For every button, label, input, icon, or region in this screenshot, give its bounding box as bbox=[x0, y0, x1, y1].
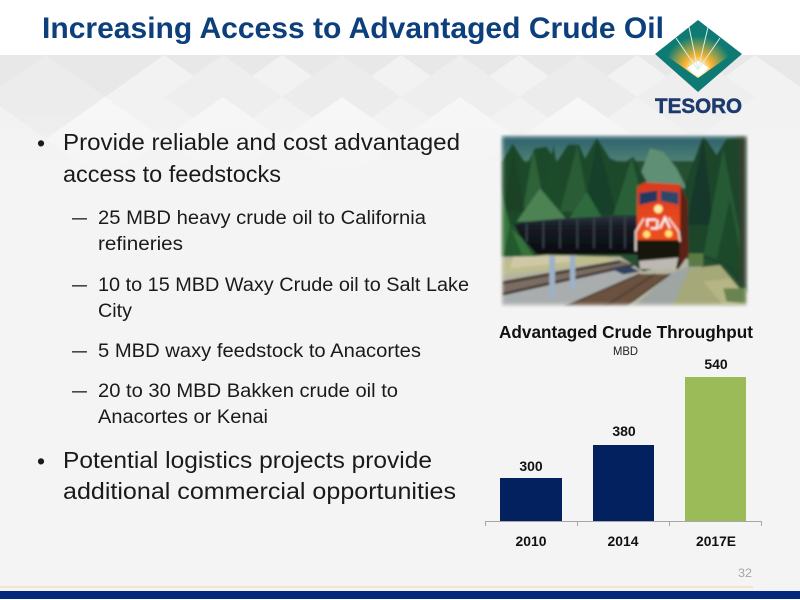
bullet: logistics projects: additional commercial opportunities bbox=[63, 478, 456, 504]
sub-bullet: California: refineries bbox=[98, 234, 183, 255]
sub-bullet: Bakken: 20 to 30 MBD Bakken crude oil to bbox=[98, 381, 398, 402]
sub-bullet: Anacortes: 5 MBD waxy feedstock to Anacortes bbox=[98, 341, 421, 362]
sub-bullet: California: 25 MBD heavy crude oil to California bbox=[98, 208, 426, 229]
sub-bullet: California: – bbox=[72, 208, 88, 229]
page number: 32 bbox=[738, 566, 752, 580]
bar: 2014: 380 bbox=[612, 423, 636, 439]
x axis: 2014 bbox=[608, 533, 639, 549]
bullet: feedstock access: • bbox=[37, 130, 45, 156]
logo wordmark: TESORO bbox=[655, 95, 742, 118]
sub-bullet: Bakken: Anacortes or Kenai bbox=[98, 407, 268, 428]
x axis: 2017E bbox=[696, 533, 736, 549]
bar: 2017E bbox=[685, 356, 746, 521]
sub-bullet: Salt Lake City bbox=[72, 275, 469, 322]
bar: 2014 bbox=[593, 423, 654, 521]
sub-bullet: Salt Lake City: – bbox=[72, 275, 88, 296]
icon: diamond sunburst bbox=[655, 20, 742, 92]
sub-bullet: Salt Lake City: City bbox=[98, 301, 133, 322]
bar chart: advantaged crude throughput bbox=[486, 322, 762, 549]
bullet: logistics projects bbox=[37, 447, 456, 504]
sub-bullet: Bakken: – bbox=[72, 381, 88, 402]
title: Increasing Access to Advantaged Crude Oil bbox=[42, 12, 664, 45]
chart unit: MBD bbox=[613, 344, 638, 358]
sub-bullet: California bbox=[72, 208, 426, 255]
x axis: 2010 bbox=[516, 533, 547, 549]
footer bands bbox=[0, 586, 800, 599]
x axis bbox=[486, 522, 762, 549]
chart title: Advantaged Crude Throughput bbox=[499, 322, 753, 342]
bullet list bbox=[37, 129, 469, 504]
bar: 2010 bbox=[500, 458, 562, 521]
bullet: logistics projects: Potential logistics projects provide bbox=[63, 447, 432, 473]
sub-bullet: Bakken bbox=[72, 381, 398, 428]
bullet: feedstock access bbox=[37, 129, 460, 187]
bar: 2017E: 540 bbox=[704, 356, 728, 372]
bullet: feedstock access: access to feedstocks bbox=[63, 161, 281, 187]
sub-bullet: Anacortes: – bbox=[72, 341, 88, 362]
photo: oil train locomotive bbox=[500, 134, 748, 308]
sub-bullet: Salt Lake City: 10 to 15 MBD Waxy Crude oil to Salt Lake bbox=[98, 275, 469, 296]
bullet: logistics projects: • bbox=[37, 448, 45, 474]
Tesoro logo bbox=[655, 20, 742, 118]
bar: 2010: 300 bbox=[519, 458, 543, 474]
bullet: feedstock access: Provide reliable and cost advantaged bbox=[63, 129, 460, 155]
